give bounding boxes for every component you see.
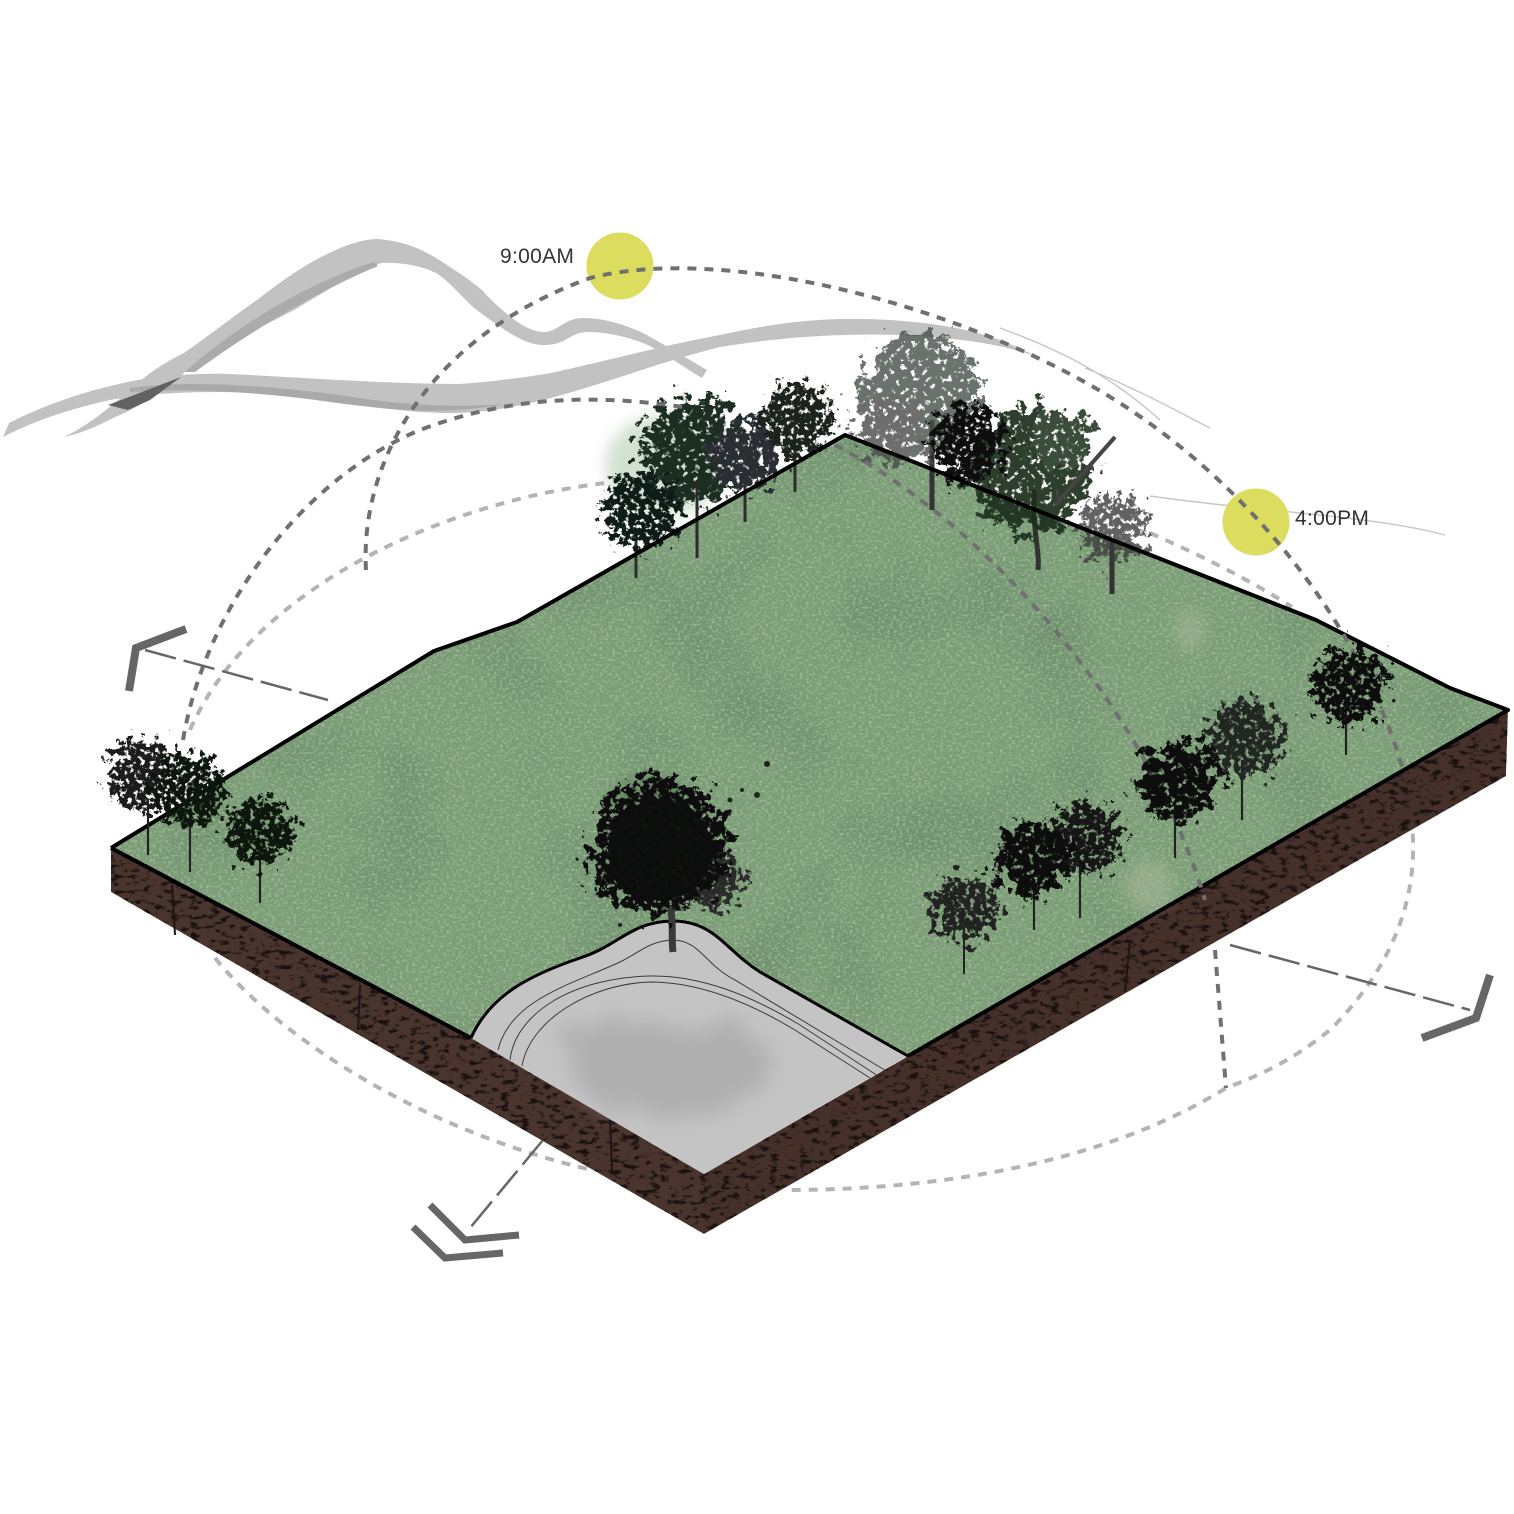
direction arrow: south-west double chevron bbox=[413, 1140, 543, 1258]
light sun path arcs behind the site bbox=[190, 483, 1413, 1190]
grass surface bbox=[111, 435, 1508, 1056]
wind stream: long horizontal stroke bbox=[3, 319, 1445, 535]
left boundary outline bbox=[111, 848, 471, 1038]
back left tree group bbox=[602, 384, 833, 578]
site boundary outline bbox=[111, 435, 1508, 1056]
sun: 4:00 PM bbox=[1222, 488, 1290, 556]
pavement staining bbox=[560, 1015, 770, 1115]
lower right tree pair bbox=[995, 802, 1121, 930]
right tree: far bbox=[1312, 647, 1388, 755]
label: 9:00AM: 9:00AM bbox=[500, 245, 574, 268]
back right tree group bbox=[856, 335, 1147, 594]
right tree pair bbox=[1138, 700, 1283, 858]
pavement bbox=[471, 921, 908, 1174]
dark soil cracks bbox=[172, 885, 1130, 1170]
label: 4:00PM: 4:00PM bbox=[1295, 507, 1369, 530]
center tree bbox=[589, 761, 770, 952]
dark sun path arcs bbox=[183, 268, 1403, 1088]
soil side: right face bbox=[704, 710, 1508, 1234]
light worn patches on grass bbox=[1126, 608, 1204, 911]
left tree group bbox=[109, 739, 293, 903]
direction arrow: south-east bbox=[1230, 945, 1490, 1038]
pavement edge outline bbox=[471, 921, 908, 1056]
sun: 9:00 AM bbox=[586, 232, 654, 300]
direction arrow: north-west bbox=[129, 629, 328, 700]
pavement marking lines bbox=[498, 940, 888, 1078]
soil side: left face bbox=[111, 848, 704, 1234]
wind stream: mountain-shaped stroke bbox=[64, 239, 707, 437]
small lower tree bbox=[931, 875, 997, 974]
